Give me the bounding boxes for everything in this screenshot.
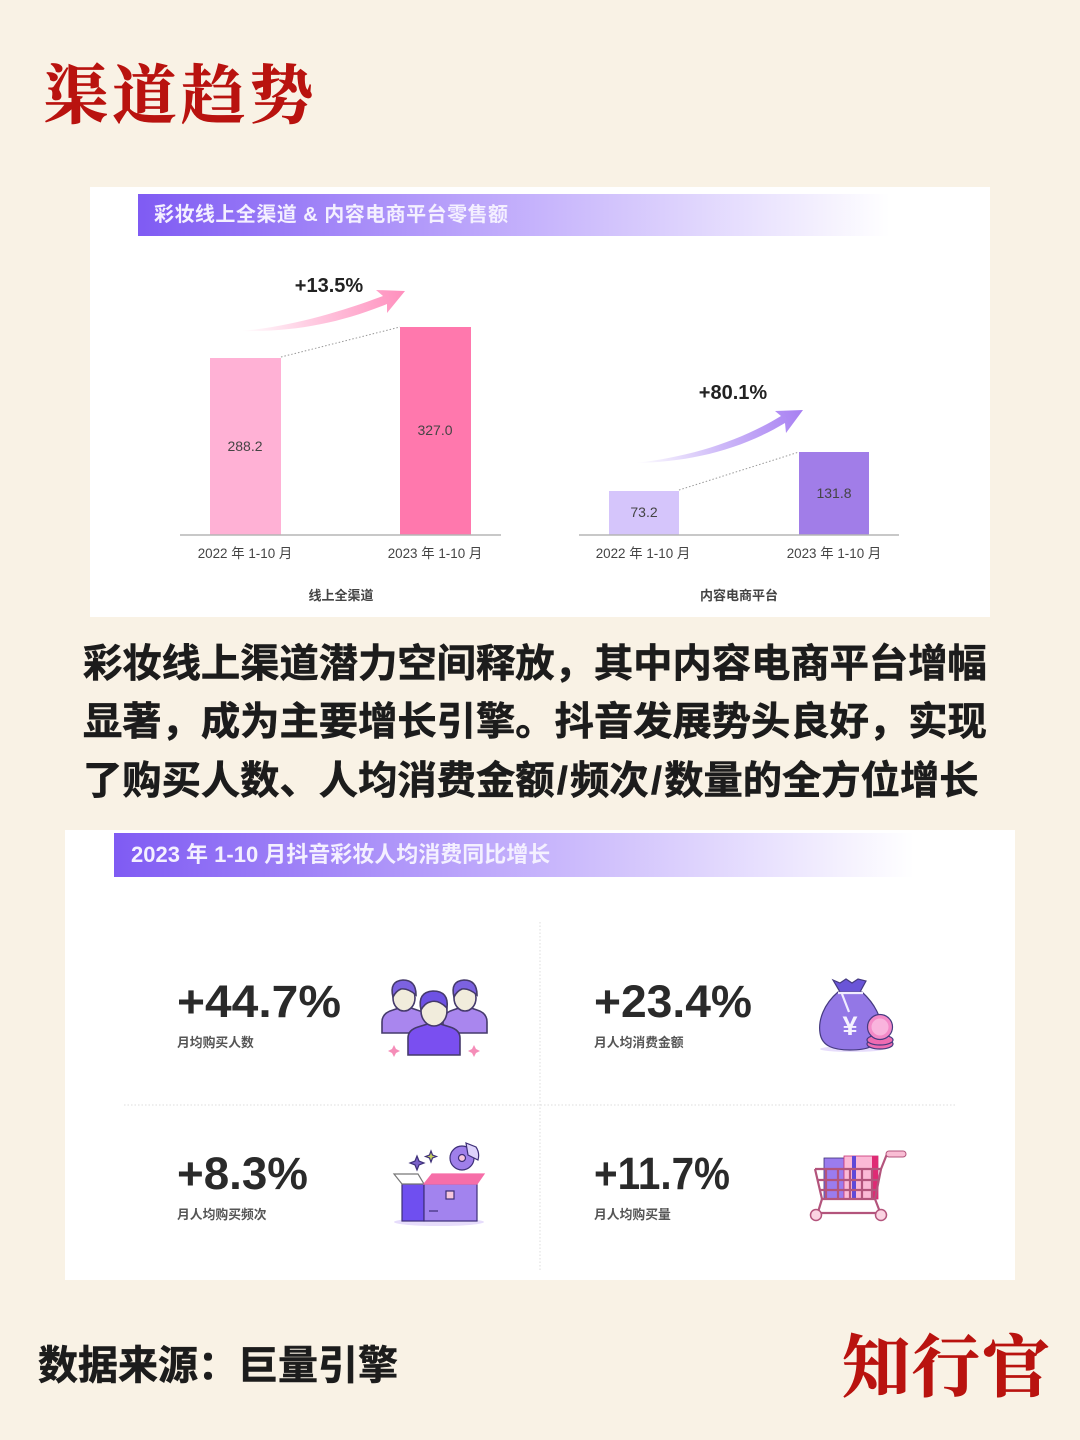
stat: spend per person (594, 976, 752, 1050)
icon: money bag (820, 979, 893, 1052)
chart header (138, 194, 890, 236)
panel header (114, 833, 914, 877)
stat: purchase frequency: 月人均购买频次 (177, 1207, 267, 1222)
icon: money bag: ¥ (842, 1011, 858, 1041)
bar chart: online all channels: 线上全渠道 (308, 588, 374, 603)
stat: purchase quantity: 月人均购买量 (594, 1207, 671, 1222)
footer source: 数据来源：巨量引擎 (38, 1344, 398, 1388)
bar chart: content e-commerce: 2023 年 1-10 月 (787, 546, 881, 561)
icon: people (382, 980, 487, 1057)
bar chart: content e-commerce: 2022 年 1-10 月 (596, 546, 690, 561)
stat: spend per person: +23.4% (594, 976, 752, 1027)
icon: shopping cart (810, 1151, 906, 1220)
panel: per capita growth (65, 830, 1015, 1280)
bar chart: content e-commerce: 131.8 (816, 485, 852, 501)
stat: spend per person: 月人均消费金额 (594, 1035, 684, 1050)
arrow: +80.1% growth (635, 382, 803, 463)
panel header: 2023 年 1-10 月抖音彩妆人均消费同比增长 (131, 842, 550, 867)
stat: monthly buyers: 月均购买人数 (177, 1035, 254, 1050)
chart header: 彩妆线上全渠道 & 内容电商平台零售额 (154, 202, 508, 226)
bar chart: content e-commerce (579, 452, 899, 603)
text block: summary (83, 642, 987, 803)
arrow: +13.5% growth (240, 275, 405, 331)
text block: summary: 彩妆线上渠道潜力空间释放，其中内容电商平台增幅 (83, 642, 987, 686)
bar chart: online all channels: 2023 年 1-10 月 (388, 546, 482, 561)
stat: purchase quantity: +11.7% (594, 1148, 730, 1199)
text block: summary: 显著，成为主要增长引擎。抖音发展势头良好，实现 (83, 700, 987, 744)
panel: retail sales chart (90, 187, 990, 617)
stat: purchase frequency (177, 1148, 308, 1222)
bar chart: online all channels: 2022 年 1-10 月 (198, 546, 292, 561)
stat: purchase quantity (594, 1148, 730, 1222)
icon: box (394, 1143, 484, 1226)
bar chart: online all channels (180, 327, 501, 603)
bar chart: online all channels: 288.2 (227, 438, 263, 454)
stat: purchase frequency: +8.3% (177, 1148, 308, 1199)
bar chart: online all channels: 327.0 (417, 422, 453, 438)
stat: monthly buyers (177, 976, 341, 1050)
bar chart: content e-commerce: 73.2 (630, 504, 658, 520)
title: 渠道趋势 (44, 61, 318, 132)
text block: summary: 了购买人数、人均消费金额/频次/数量的全方位增长 (83, 759, 979, 803)
brand logo text: 知行官 (842, 1330, 1052, 1406)
arrow: +13.5% growth: +13.5% (295, 275, 363, 297)
bar chart: content e-commerce: 内容电商平台 (700, 588, 778, 603)
arrow: +80.1% growth: +80.1% (699, 382, 767, 404)
stat: monthly buyers: +44.7% (177, 976, 341, 1027)
